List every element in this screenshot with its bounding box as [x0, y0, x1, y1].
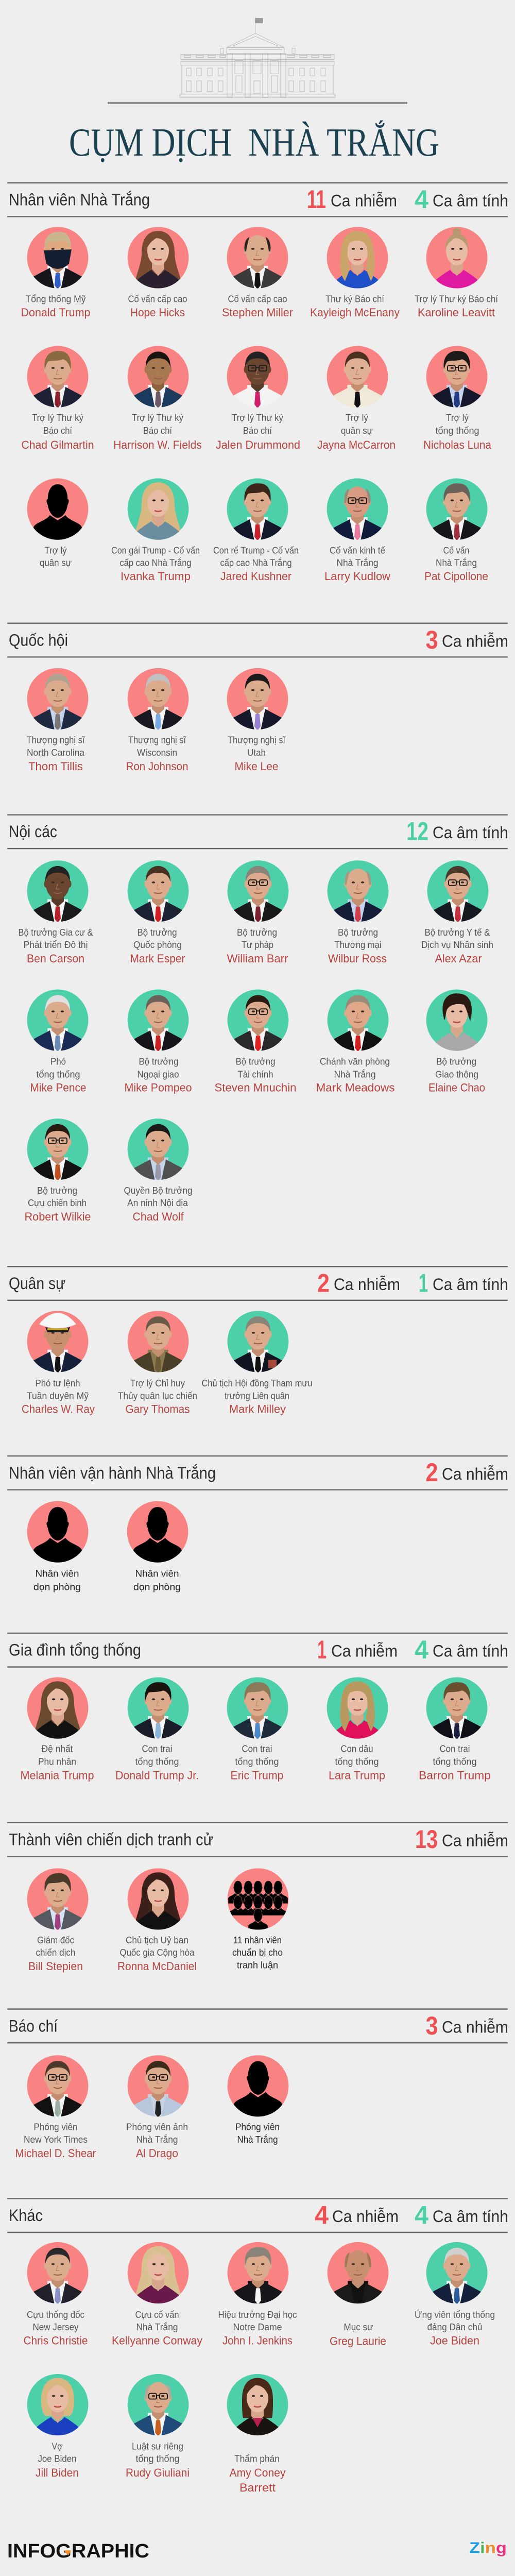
person: Ben Carson	[19, 860, 93, 965]
person: William Barr	[227, 860, 289, 965]
person: Chris Christie: New Jersey	[33, 2321, 79, 2332]
section heading: 4	[415, 1635, 428, 1664]
person: Greg Laurie: Greg Laurie	[330, 2335, 386, 2348]
person: Greg Laurie: Mục sư	[344, 2321, 373, 2332]
person: Mark Meadows	[316, 989, 395, 1094]
person: Ronna McDaniel	[117, 1868, 197, 1973]
section heading: Báo chí	[9, 2016, 58, 2035]
person: Mark Milley	[201, 1311, 312, 1416]
section heading: 4	[315, 2201, 329, 2230]
person: Nhân viên dọn phòng 1: dọn phòng	[33, 1582, 81, 1592]
person: Mark Meadows: Mark Meadows	[316, 1081, 395, 1094]
person: Kayleigh McEnany: Kayleigh McEnany	[310, 306, 400, 319]
section heading: Ca nhiễm	[334, 1275, 400, 1294]
person: Jared Kushner: Con rể Trump - Cố vấn	[213, 545, 299, 556]
section heading: Ca nhiễm	[331, 191, 397, 210]
person: Lara Trump: tổng thống	[335, 1756, 379, 1767]
person: Joe Biden: Ứng viên tổng thống	[415, 2309, 495, 2320]
panel: Quốc hội	[7, 623, 508, 773]
person: Donald Trump Jr.: Con trai	[142, 1743, 172, 1754]
person: Chad Wolf: Quyền Bộ trưởng	[124, 1185, 193, 1196]
person: Donald Trump Jr.	[115, 1677, 199, 1782]
person: Elaine Chao: Giao thông	[435, 1069, 478, 1079]
person: Jayna McCarron: Jayna McCarron	[317, 438, 396, 451]
person: Eric Trump: tổng thống	[235, 1756, 279, 1767]
section heading: Khác	[9, 2206, 43, 2225]
person: Mark Esper	[127, 860, 189, 965]
person group: 11 nhân viên	[227, 1868, 289, 1971]
title: CỤM DỊCH NHÀ TRẮNG	[69, 120, 439, 164]
person: Jalen Drummond: Jalen Drummond	[216, 438, 300, 451]
person: Melania Trump: Đệ nhất	[41, 1743, 73, 1754]
section heading: Quốc hội	[9, 631, 68, 649]
person: Al Drago: Nhà Trắng	[136, 2134, 178, 2145]
person: Robert Wilkie: Cựu chiến binh	[28, 1197, 87, 1208]
person: Chris Christie: Chris Christie	[24, 2334, 88, 2347]
person: Eric Trump: Eric Trump	[230, 1769, 283, 1782]
person: Donald Trump Jr.: Donald Trump Jr.	[115, 1769, 199, 1782]
person: Nhân viên dọn phòng 2: dọn phòng	[133, 1582, 181, 1592]
person: Alex Azar	[421, 860, 493, 965]
person: Elaine Chao	[426, 989, 487, 1094]
person: William Barr: Tư pháp	[242, 939, 273, 950]
person: Mike Lee: Thượng nghị sĩ	[228, 734, 286, 745]
person: Jill Biden	[27, 2374, 89, 2479]
person: Hope Hicks	[128, 227, 188, 319]
section heading: 4	[415, 2201, 428, 2230]
person: Bill Stepien	[27, 1868, 89, 1973]
divider under White House	[108, 102, 407, 104]
person: Lara Trump	[327, 1677, 388, 1782]
person: Nicholas Luna: tổng thống	[436, 425, 479, 436]
person: Al Drago	[126, 2055, 189, 2160]
section heading	[7, 1823, 508, 1856]
section heading	[7, 1633, 508, 1667]
person: Ronna McDaniel: Quốc gia Cộng hòa	[119, 1947, 195, 1958]
person: Steven Mnuchin	[214, 989, 297, 1094]
person: Nicholas Luna: Nicholas Luna	[423, 438, 492, 451]
person: Wilbur Ross: Wilbur Ross	[328, 952, 387, 965]
person: Jalen Drummond	[216, 346, 300, 451]
person: Rudy Giuliani	[126, 2374, 190, 2479]
person: Karoline Leavitt: Trợ lý Thư ký Báo chí	[415, 294, 499, 304]
section heading: Ca âm tính	[433, 2207, 508, 2226]
person group: 11 nhân viên: chuẩn bị cho	[232, 1947, 283, 1958]
panel: Thành viên chiến dịch tranh cử	[7, 1823, 508, 1973]
person: Alex Azar: Alex Azar	[435, 952, 482, 965]
person: Rudy Giuliani: tổng thống	[136, 2453, 179, 2464]
section heading: 4	[415, 185, 428, 214]
person: Mark Esper: Mark Esper	[130, 952, 185, 965]
person: Chad Gilmartin	[22, 346, 94, 451]
person: Mike Lee: Mike Lee	[235, 760, 278, 773]
panel: Khác	[7, 2198, 508, 2494]
section heading	[7, 2009, 508, 2043]
person: Ronna McDaniel: Ronna McDaniel	[117, 1960, 197, 1973]
person: Michael D. Shear: Phóng viên	[34, 2122, 77, 2132]
person: Stephen Miller: Stephen Miller	[222, 306, 293, 319]
person: Mike Lee: Utah	[247, 747, 266, 758]
person: Elaine Chao: Elaine Chao	[428, 1081, 485, 1094]
person: Jared Kushner	[213, 478, 299, 583]
section heading: Nhân viên Nhà Trắng	[9, 190, 150, 209]
person: Amy Coney Barrett: Thẩm phán	[234, 2453, 280, 2464]
person: Phóng viên Nhà Trắng (unnamed): Nhà Trắng	[237, 2134, 278, 2145]
section heading: Ca âm tính	[433, 1275, 508, 1294]
person: Mike Pence: Phó	[50, 1056, 66, 1067]
person: Michael D. Shear	[15, 2055, 96, 2160]
person: Nicholas Luna: Trợ lý	[446, 412, 469, 423]
person: Mark Esper: Bộ trưởng	[137, 927, 177, 938]
person: Mike Lee	[227, 668, 288, 773]
person: Barron Trump: tổng thống	[433, 1756, 477, 1767]
person: Gary Thomas: Thủy quân lục chiến	[118, 1391, 197, 1401]
person: Ben Carson: Ben Carson	[27, 952, 84, 965]
icon: White House line drawing	[180, 17, 335, 98]
person: Nicholas Luna	[423, 346, 492, 451]
section heading: Nội các	[9, 822, 57, 841]
person: Melania Trump	[21, 1677, 94, 1782]
section heading: Ca nhiễm	[442, 1464, 508, 1483]
person: Pat Cipollone: Cố vấn	[443, 545, 469, 556]
section heading	[7, 2198, 508, 2232]
person: Chad Wolf: An ninh Nội địa	[127, 1197, 188, 1208]
person: Gary Thomas: Trợ lý Chỉ huy	[130, 1378, 185, 1388]
person: Amy Coney Barrett	[227, 2374, 288, 2494]
person: Steven Mnuchin: Tài chính	[237, 1069, 273, 1079]
section heading: Ca nhiễm	[442, 632, 508, 650]
person: Lara Trump: Con dâu	[341, 1743, 373, 1754]
person: Larry Kudlow: Cố vấn kinh tế	[330, 545, 385, 556]
person: Ivanka Trump: Con gái Trump - Cố vấn	[111, 545, 200, 556]
person: Mike Pence: Mike Pence	[30, 1081, 86, 1094]
person: Jayna McCarron	[317, 346, 396, 451]
person: Steven Mnuchin: Bộ trưởng	[235, 1056, 275, 1067]
person: Kellyanne Conway	[112, 2242, 202, 2347]
person: Chad Gilmartin: Chad Gilmartin	[22, 438, 94, 451]
person: Pat Cipollone	[424, 478, 488, 583]
person: Kellyanne Conway: Cựu cố vấn	[135, 2309, 179, 2320]
person: Joe Biden: Joe Biden	[430, 2334, 479, 2347]
person: Mark Milley: Mark Milley	[229, 1403, 286, 1416]
person: Ron Johnson: Ron Johnson	[126, 760, 188, 773]
person: Jared Kushner: cấp cao Nhà Trắng	[220, 557, 292, 568]
section heading: Ca âm tính	[433, 191, 508, 210]
person: Thom Tillis: Thượng nghị sĩ	[27, 734, 85, 745]
person: Mike Pompeo	[124, 989, 192, 1094]
person: Larry Kudlow: Nhà Trắng	[337, 557, 378, 568]
person: John I. Jenkins	[218, 2242, 297, 2347]
person: Jill Biden: Jill Biden	[36, 2466, 79, 2479]
person: Hope Hicks: Hope Hicks	[130, 306, 185, 319]
section heading	[7, 815, 508, 849]
person: Jayna McCarron: quân sự	[341, 425, 373, 436]
person: Wilbur Ross	[327, 860, 389, 965]
section heading: Nhân viên vận hành Nhà Trắng	[9, 1463, 216, 1482]
person: Joe Biden	[415, 2242, 495, 2347]
person: Michael D. Shear: New York Times	[24, 2134, 88, 2145]
section heading: Thành viên chiến dịch tranh cử	[9, 1830, 213, 1849]
person: Thom Tillis: Thom Tillis	[28, 760, 83, 773]
person: Phóng viên Nhà Trắng (unnamed): Phóng viên	[235, 2122, 280, 2132]
person: John I. Jenkins: John I. Jenkins	[222, 2334, 293, 2347]
person: Jared Kushner: Jared Kushner	[220, 570, 291, 583]
person: Chad Wolf: Chad Wolf	[133, 1210, 184, 1223]
person group: 11 nhân viên: 11 nhân viên	[233, 1935, 282, 1945]
person: Jalen Drummond: Báo chí	[243, 425, 272, 436]
person: Karoline Leavitt	[415, 227, 499, 319]
person: Donald Trump: Tổng thống Mỹ	[26, 294, 86, 304]
person: Chad Gilmartin: Trợ lý Thư ký	[32, 412, 84, 423]
person: Ron Johnson: Thượng nghị sĩ	[128, 734, 186, 745]
person: Al Drago: Al Drago	[136, 2147, 178, 2160]
section heading	[7, 1456, 508, 1490]
person: Bill Stepien: Giám đốc	[37, 1935, 74, 1945]
person: Barron Trump: Con trai	[440, 1743, 470, 1754]
person: Gary Thomas	[118, 1311, 197, 1416]
person: John I. Jenkins: Notre Dame	[233, 2321, 282, 2332]
person: Stephen Miller	[222, 227, 293, 319]
section heading: 11	[307, 185, 326, 214]
person: Pat Cipollone: Nhà Trắng	[436, 557, 477, 568]
person: William Barr: Bộ trưởng	[237, 927, 277, 938]
person: Amy Coney Barrett: Barrett	[239, 2481, 276, 2494]
person: Kellyanne Conway: Nhà Trắng	[136, 2321, 178, 2332]
person: Trợ lý quân sự (unnamed): Trợ lý	[44, 545, 67, 556]
section heading: 1	[419, 1269, 428, 1297]
person: Steven Mnuchin: Steven Mnuchin	[214, 1081, 296, 1094]
person: Nhân viên dọn phòng 1	[27, 1501, 89, 1592]
person: Nhân viên dọn phòng 2: Nhân viên	[135, 1568, 179, 1579]
person: Nhân viên dọn phòng 1: Nhân viên	[35, 1568, 79, 1579]
person: Harrison W. Fields: Harrison W. Fields	[113, 438, 202, 451]
person: Barron Trump: Barron Trump	[419, 1769, 491, 1782]
footer logo: INFOGRAPHIC: INFOGRAPHIC	[7, 2540, 149, 2562]
section heading: Ca âm tính	[433, 1641, 508, 1660]
section heading: 1	[317, 1635, 327, 1664]
person: Bill Stepien: chiến dịch	[36, 1947, 76, 1958]
person: Michael D. Shear: Michael D. Shear	[15, 2147, 96, 2160]
person: Thom Tillis	[27, 668, 89, 773]
person: Mark Meadows: Chánh văn phòng	[320, 1056, 390, 1067]
section heading: Ca nhiễm	[442, 1831, 508, 1850]
person: Kellyanne Conway: Kellyanne Conway	[112, 2334, 202, 2347]
person: Mark Milley: Chủ tịch Hội đồng Tham mưu	[201, 1378, 312, 1388]
person: Pat Cipollone: Pat Cipollone	[424, 570, 488, 583]
person: Jill Biden: Joe Biden	[38, 2453, 76, 2464]
person: Eric Trump	[227, 1677, 288, 1782]
person: Charles W. Ray: Charles W. Ray	[22, 1403, 95, 1416]
person: Thom Tillis: North Carolina	[27, 747, 85, 758]
person: Karoline Leavitt: Karoline Leavitt	[418, 306, 495, 319]
panel: Báo chí	[7, 2009, 508, 2160]
person: Al Drago: Phóng viên ảnh	[126, 2122, 188, 2132]
person: Ben Carson: Phát triển Đô thị	[24, 939, 88, 950]
section heading: 2	[425, 1458, 438, 1487]
person: Phóng viên Nhà Trắng (unnamed)	[228, 2055, 288, 2145]
panel: Nội các	[7, 815, 508, 1223]
person: Harrison W. Fields: Báo chí	[143, 425, 173, 436]
person: Chris Christie: Cựu thống đốc	[27, 2309, 84, 2320]
person: Alex Azar: Dịch vụ Nhân sinh	[421, 939, 493, 950]
person: Wilbur Ross: Thương mại	[335, 939, 381, 950]
person: Barron Trump	[419, 1677, 491, 1782]
section heading: Quân sự	[9, 1274, 65, 1293]
person: Jill Biden: Vợ	[52, 2441, 63, 2451]
panel: Nhân viên vận hành Nhà Trắng	[7, 1456, 508, 1592]
person: Elaine Chao: Bộ trưởng	[436, 1056, 476, 1067]
section heading: 2	[317, 1269, 330, 1297]
person: Melania Trump: Phu nhân	[38, 1756, 76, 1767]
person: Stephen Miller: Cố vấn cấp cao	[228, 294, 287, 304]
person: William Barr: William Barr	[227, 952, 288, 965]
person: Ronna McDaniel: Chủ tịch Uỷ ban	[126, 1935, 188, 1945]
person: Mike Pence: tổng thống	[36, 1069, 80, 1079]
person: Ben Carson: Bộ trưởng Gia cư &	[19, 927, 93, 938]
person: Ron Johnson	[126, 668, 189, 773]
person: Joe Biden: đảng Dân chủ	[427, 2321, 483, 2332]
person: Chris Christie	[24, 2242, 89, 2347]
person: Amy Coney Barrett: Amy Coney	[230, 2466, 286, 2479]
person: John I. Jenkins: Hiệu trưởng Đại học	[218, 2309, 297, 2320]
person: Donald Trump Jr.: tổng thống	[135, 1756, 179, 1767]
section heading: 3	[425, 2011, 438, 2040]
person: Mark Milley: trưởng Liên quân	[225, 1391, 289, 1401]
person: Ivanka Trump: cấp cao Nhà Trắng	[119, 557, 192, 568]
footer logo: Zing: Zing	[469, 2538, 507, 2556]
person: Mike Pompeo: Bộ trưởng	[139, 1056, 178, 1067]
person: Mark Esper: Quốc phòng	[133, 939, 182, 950]
person: Larry Kudlow: Larry Kudlow	[324, 570, 390, 583]
person: Lara Trump: Lara Trump	[329, 1769, 385, 1782]
person: Robert Wilkie: Robert Wilkie	[25, 1210, 91, 1223]
person: Rudy Giuliani: Luật sư riêng	[132, 2441, 183, 2451]
person: Bill Stepien: Bill Stepien	[28, 1960, 83, 1973]
person: Kayleigh McEnany: Thư ký Báo chí	[325, 294, 385, 304]
person: Trợ lý quân sự (unnamed)	[27, 478, 89, 568]
person: Donald Trump	[21, 227, 90, 319]
person: Ron Johnson: Wisconsin	[137, 747, 177, 758]
section heading: Ca nhiễm	[442, 2017, 508, 2036]
section heading: 3	[425, 625, 438, 654]
person: Donald Trump: Donald Trump	[21, 306, 90, 319]
person: Robert Wilkie	[25, 1118, 91, 1223]
person: Jayna McCarron: Trợ lý	[346, 412, 369, 423]
person: Hope Hicks: Cố vấn cấp cao	[128, 294, 187, 304]
section heading	[7, 1266, 508, 1300]
section heading: Ca âm tính	[433, 823, 508, 842]
person: Kayleigh McEnany	[310, 227, 400, 319]
person: Ivanka Trump	[111, 478, 200, 583]
person: Greg Laurie	[327, 2242, 389, 2348]
person: Ivanka Trump: Ivanka Trump	[121, 570, 191, 583]
person: Chad Wolf	[124, 1118, 193, 1223]
person: Mike Pompeo: Mike Pompeo	[124, 1081, 192, 1094]
person: Mike Pence	[27, 989, 89, 1094]
person: Charles W. Ray: Phó tư lệnh	[36, 1378, 80, 1388]
section heading: 13	[415, 1825, 438, 1854]
person: Rudy Giuliani: Rudy Giuliani	[126, 2466, 190, 2479]
person: Harrison W. Fields	[113, 346, 202, 451]
section heading: 12	[406, 817, 428, 846]
person: Wilbur Ross: Bộ trưởng	[338, 927, 378, 938]
section heading	[7, 623, 508, 657]
person: Chad Gilmartin: Báo chí	[43, 425, 73, 436]
person: Jalen Drummond: Trợ lý Thư ký	[232, 412, 284, 423]
section heading: Ca nhiễm	[331, 1641, 398, 1660]
section heading: Ca nhiễm	[332, 2207, 399, 2226]
panel: Quân sự	[7, 1266, 508, 1416]
person: Gary Thomas: Gary Thomas	[126, 1403, 190, 1416]
person group: 11 nhân viên: tranh luận	[237, 1960, 278, 1971]
section heading	[7, 183, 508, 216]
person: Nhân viên dọn phòng 2	[127, 1501, 188, 1592]
person: Melania Trump: Melania Trump	[21, 1769, 94, 1782]
person: Harrison W. Fields: Trợ lý Thư ký	[132, 412, 184, 423]
person: Eric Trump: Con trai	[242, 1743, 272, 1754]
person: Charles W. Ray: Tuần duyên Mỹ	[27, 1391, 89, 1401]
person: Larry Kudlow	[324, 478, 390, 583]
person: Charles W. Ray	[22, 1311, 95, 1416]
person: Mike Pompeo: Ngoại giao	[137, 1069, 179, 1079]
panel: Gia đình tổng thống	[7, 1633, 508, 1782]
person: Trợ lý quân sự (unnamed): quân sự	[40, 557, 72, 568]
section heading: Gia đình tổng thống	[9, 1640, 141, 1659]
panel: Nhân viên Nhà Trắng	[7, 183, 508, 583]
person: Mark Meadows: Nhà Trắng	[334, 1069, 375, 1079]
person: Robert Wilkie: Bộ trưởng	[37, 1185, 77, 1196]
person: Alex Azar: Bộ trưởng Y tế &	[424, 927, 490, 938]
